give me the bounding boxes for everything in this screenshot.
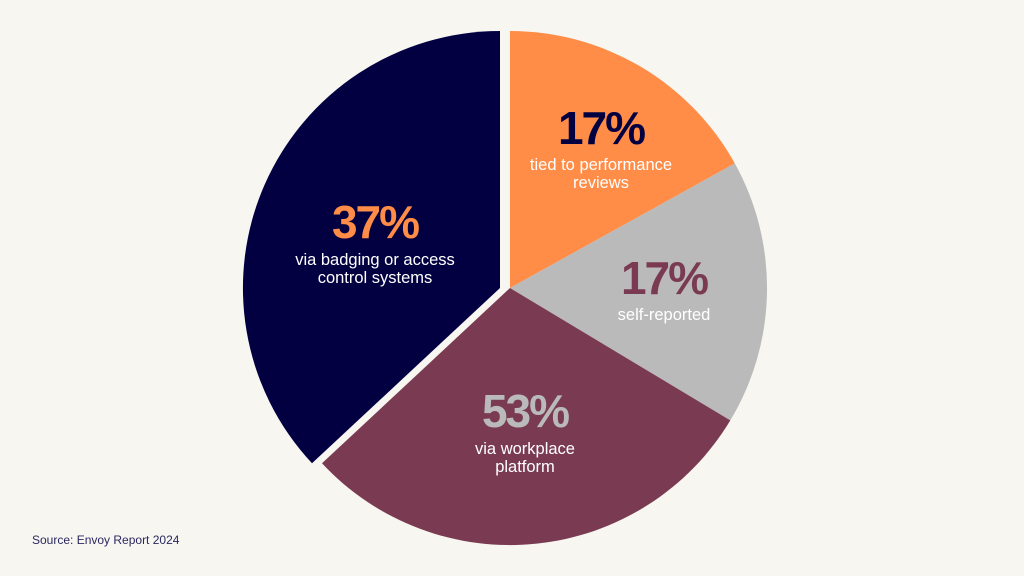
- label: 53% workplace platform: platform: [495, 458, 555, 476]
- slice: gray self-reported: [510, 163, 767, 420]
- label: 17% performance reviews: reviews: [573, 174, 629, 192]
- label: 37% badging: [295, 196, 455, 287]
- label: 37% badging: via badging or access: [295, 251, 455, 269]
- label: 53% workplace platform: 53%: [482, 385, 569, 437]
- label: 53% workplace platform: [475, 385, 575, 476]
- label: 17% performance reviews: [530, 102, 672, 192]
- label: 17% performance reviews: tied to performance: [530, 156, 672, 174]
- label: 53% workplace platform: via workplace: [475, 440, 575, 458]
- slice: navy badging: [243, 31, 500, 463]
- slice: maroon workplace platform: [322, 288, 730, 545]
- label: 17% self-reported: [618, 252, 710, 324]
- label: 17% performance reviews: 17%: [558, 102, 645, 154]
- slice: orange tied to performance reviews: [510, 31, 735, 288]
- label: 17% self-reported: 17%: [621, 252, 708, 304]
- pie chart: [243, 31, 767, 545]
- label: 37% badging: control systems: [318, 269, 432, 287]
- label: 37% badging: 37%: [332, 196, 419, 248]
- label: 17% self-reported: self-reported: [618, 306, 710, 324]
- source text: Source: Envoy Report 2024: [32, 533, 180, 547]
